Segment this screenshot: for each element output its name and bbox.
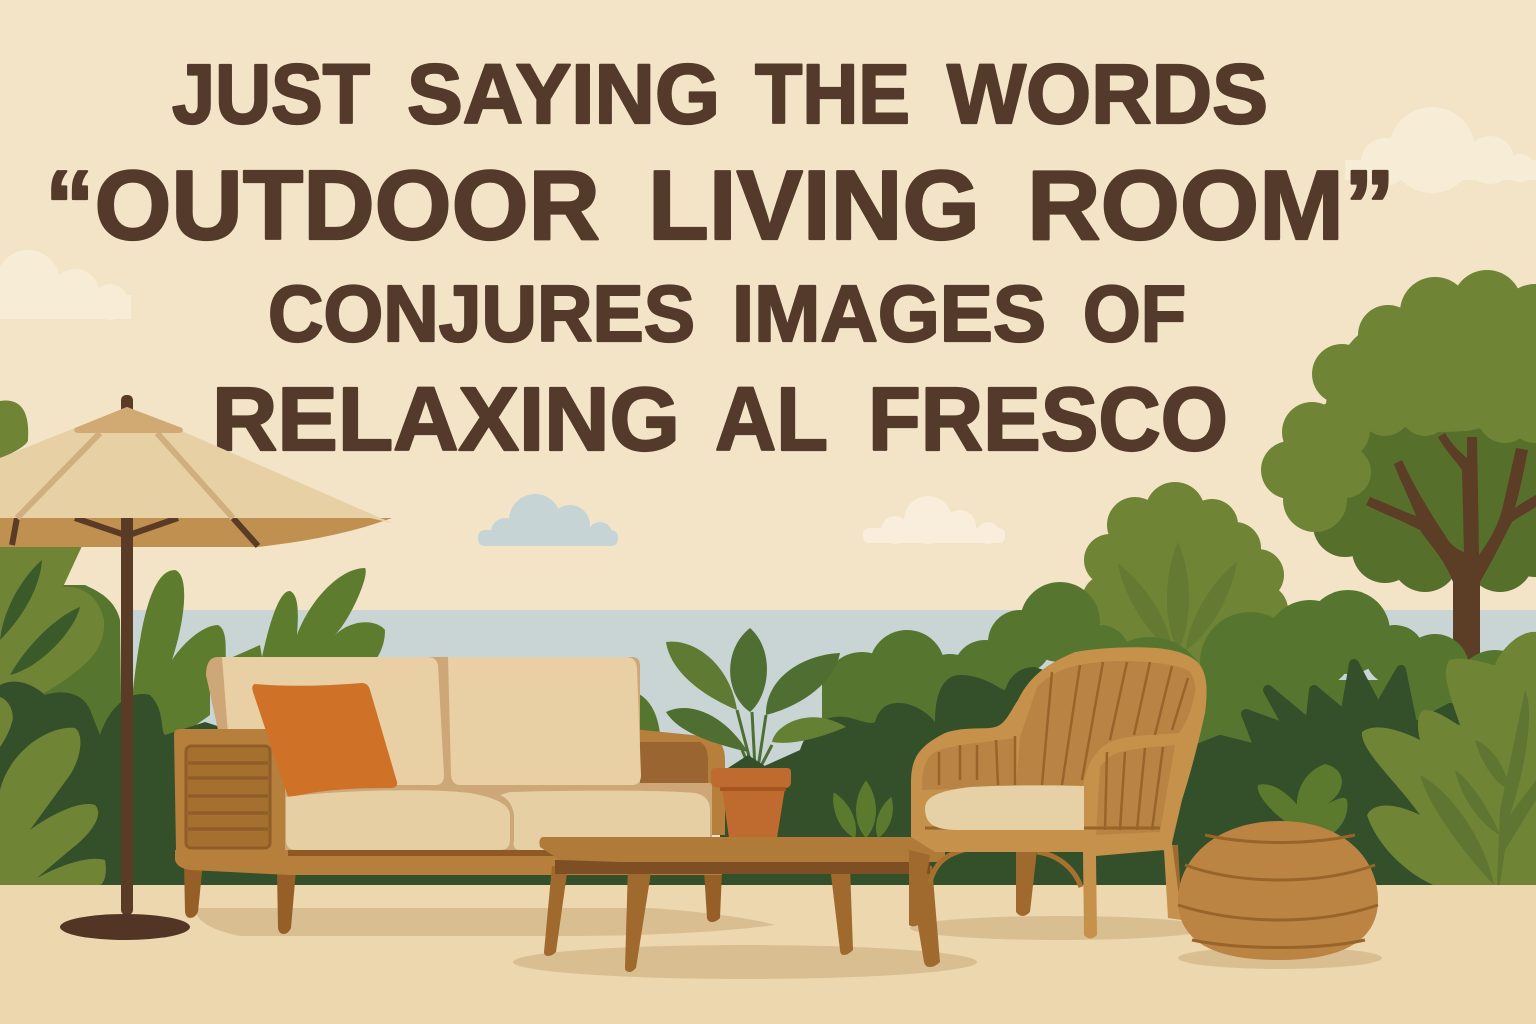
title line 2: LIVING <box>648 150 980 260</box>
ground shadows <box>195 908 1382 979</box>
cloud: cream <box>863 496 1005 544</box>
bottom left olive leaves <box>0 728 106 885</box>
title line 1: WORDS <box>947 47 1268 141</box>
title line 3 <box>268 269 1186 358</box>
leaves behind sofa <box>133 568 385 800</box>
title line 1: THE <box>755 47 910 141</box>
tree trunk <box>1366 433 1536 660</box>
tree lower foliage <box>1313 420 1536 592</box>
right arm <box>632 729 725 835</box>
chair frame <box>911 647 1207 938</box>
armchair <box>909 647 1207 938</box>
umbrella cap <box>74 407 183 433</box>
pot <box>711 768 791 842</box>
tree upper foliage <box>1261 270 1536 532</box>
umbrella canopy <box>0 407 392 523</box>
potted plant <box>666 628 846 842</box>
dark hedge left <box>0 682 800 885</box>
seat cushion right <box>500 791 710 850</box>
title line 4: FRESCO <box>868 370 1228 470</box>
front right foliage <box>1362 632 1536 885</box>
small shrub centre <box>827 780 898 841</box>
title line 3: IMAGES <box>732 269 1046 358</box>
chair inner back <box>1016 661 1195 787</box>
chair rail <box>925 826 1160 830</box>
table legs <box>544 866 940 972</box>
title line 3: OF <box>1083 269 1186 358</box>
plant leaves <box>666 628 846 752</box>
small shrub right <box>1258 764 1348 835</box>
title line 4 <box>212 370 1228 470</box>
chair legs <box>909 845 1182 926</box>
left hedge and foliage <box>0 401 800 885</box>
cloud: blue <box>478 494 618 546</box>
chair slats <box>939 662 1188 830</box>
olive bush behind <box>1082 482 1288 675</box>
tree right <box>1261 270 1536 660</box>
chair cushion <box>925 785 1084 830</box>
table band <box>555 860 930 874</box>
sofa <box>174 657 725 934</box>
pouf stripes <box>1178 835 1378 948</box>
back cushion right <box>448 657 641 785</box>
title line 1: SAYING <box>407 47 720 141</box>
title line 3: CONJURES <box>268 269 695 358</box>
pouf <box>1178 821 1378 960</box>
frame <box>175 850 722 875</box>
title line 2: ROOM” <box>1027 150 1395 260</box>
mid green bushes <box>822 582 1536 790</box>
cloud: left <box>0 250 131 320</box>
umbrella <box>0 395 392 940</box>
title line 2: “OUTDOOR <box>45 150 600 260</box>
dark leaves <box>0 560 80 675</box>
sofa back frame <box>206 657 640 785</box>
pillow <box>252 683 397 797</box>
seat seam base <box>285 783 712 850</box>
plant base <box>728 755 768 768</box>
arm slats <box>186 746 270 848</box>
upper left olive blob <box>0 401 28 458</box>
sea band <box>130 610 1536 780</box>
umbrella pole <box>121 395 133 915</box>
cloud: top right <box>1345 107 1536 193</box>
title line 1 <box>172 47 1268 141</box>
plant stems <box>737 710 772 768</box>
umbrella struts <box>12 518 258 546</box>
sofa legs <box>184 862 722 934</box>
small bush by sofa <box>630 692 660 735</box>
title line 2 <box>45 150 1395 260</box>
title line 4: RELAXING <box>212 370 680 470</box>
left arm <box>174 729 285 870</box>
mid green bush left <box>20 585 122 770</box>
ground <box>0 885 1536 1024</box>
light olive mass <box>0 546 104 695</box>
title line 1: JUST <box>172 47 370 141</box>
dark green hedge right <box>720 664 1536 885</box>
table top <box>539 837 945 862</box>
umbrella base <box>60 914 190 940</box>
back cushion left <box>222 657 444 785</box>
title line 4: AL <box>715 370 828 470</box>
chair inner right <box>1096 745 1175 835</box>
umbrella ribs <box>17 433 233 518</box>
seat cushion left <box>286 790 510 850</box>
chair inner side <box>922 738 1016 790</box>
coffee table <box>539 837 945 972</box>
umbrella underside <box>0 518 392 547</box>
title <box>45 47 1395 470</box>
